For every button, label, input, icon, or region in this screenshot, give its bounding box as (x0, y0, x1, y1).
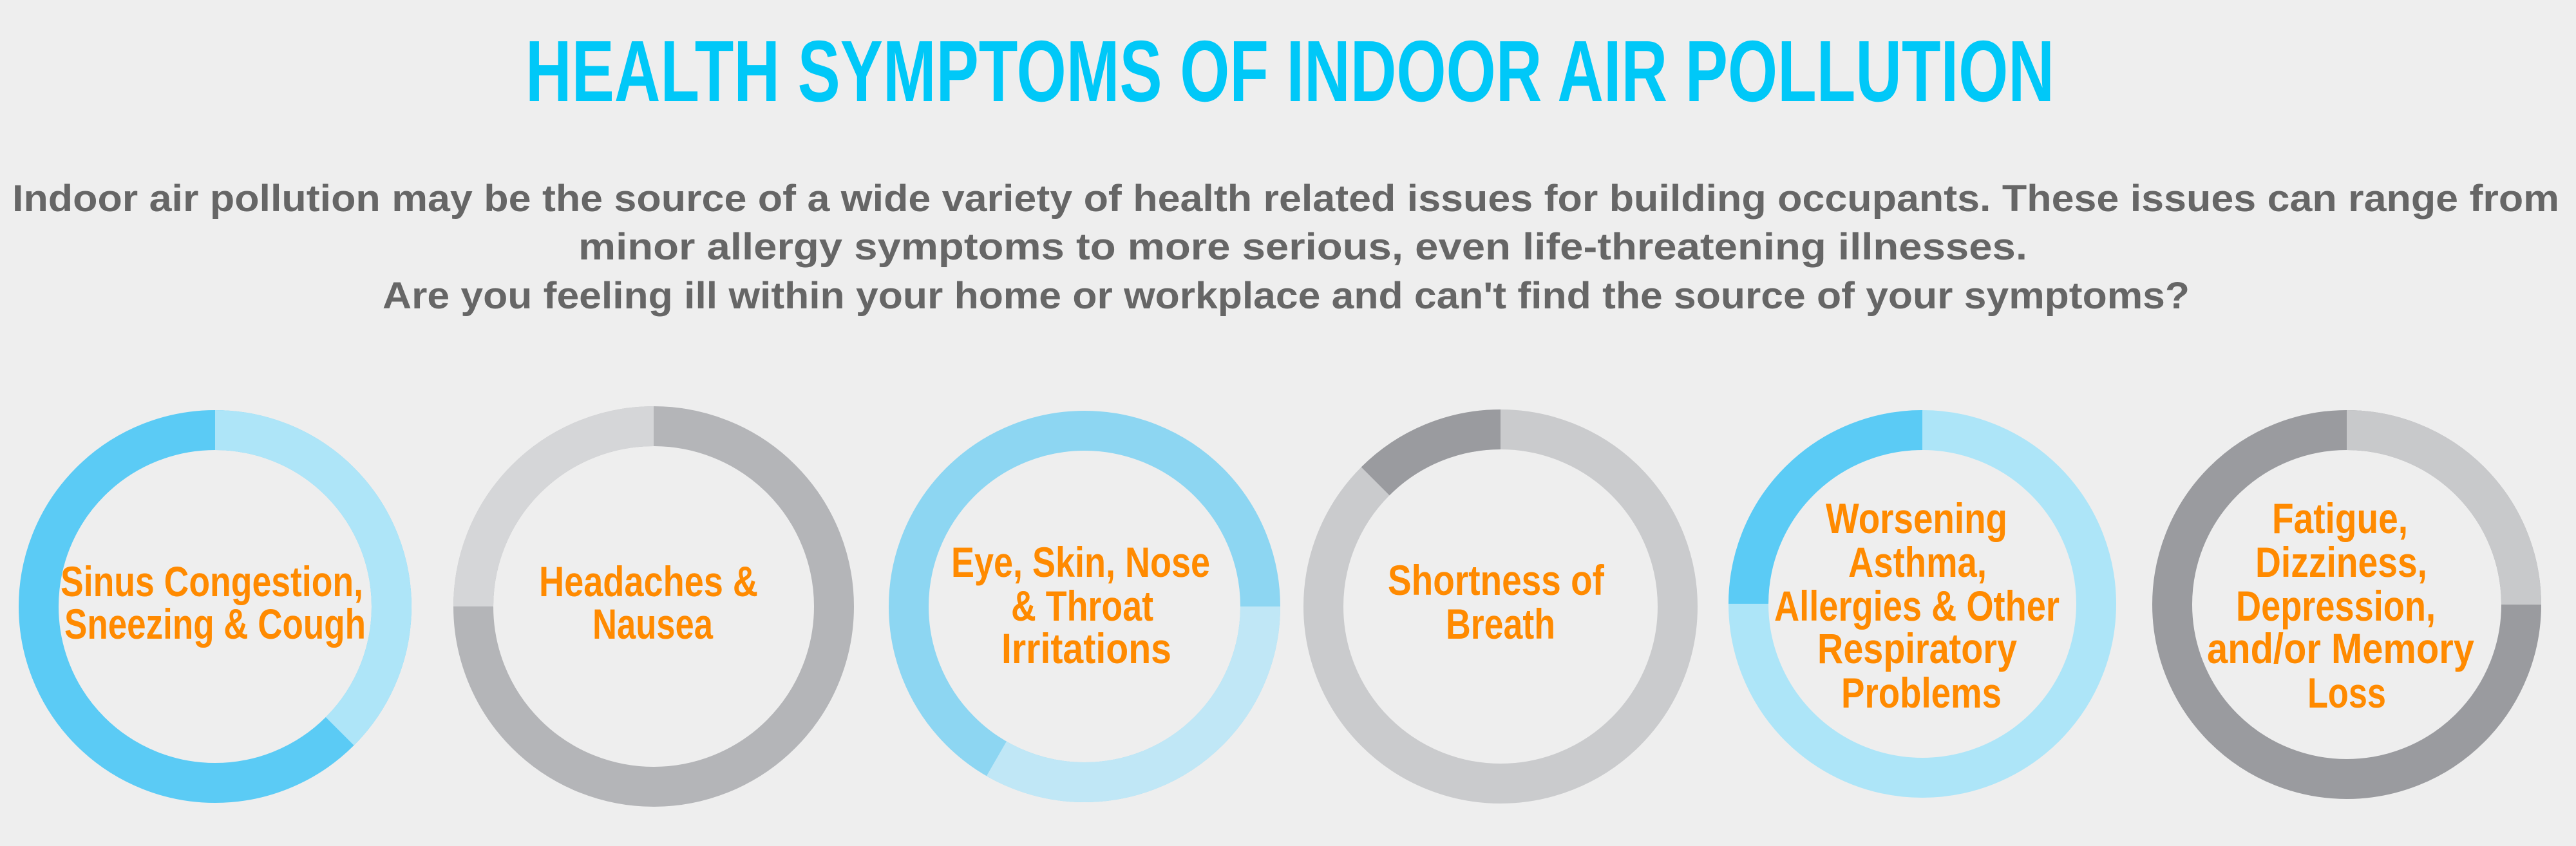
circle 6: fatigue: Fatigue, (2272, 494, 2408, 542)
circle 5: asthma: Respiratory (1817, 625, 2017, 672)
circle 4: shortness of breath: Shortness of (1388, 556, 1605, 604)
circle 3: eye skin nose (909, 431, 1260, 782)
circle 3: eye skin nose: Irritations (1001, 625, 1171, 672)
circle 5: asthma: Worsening (1826, 494, 2007, 542)
intro text: minor allergy symptoms to more serious, even life-threatening illnesses. (578, 226, 2027, 268)
circle 5: asthma (1748, 430, 2096, 778)
intro text (12, 178, 2559, 317)
circle 2: headaches (473, 426, 834, 787)
circle 3: eye skin nose: & Throat (1011, 582, 1153, 630)
circle 6: fatigue: Dizziness, (2255, 538, 2427, 586)
circle 5: asthma: Asthma, (1848, 538, 1987, 586)
circle 2: headaches: Headaches & (539, 558, 758, 605)
circle 1: sinus: Sinus Congestion, (61, 558, 363, 605)
circle 6: fatigue: Loss (2307, 669, 2386, 717)
circle 1: sinus: Sneezing & Cough (64, 600, 366, 648)
circle 6: fatigue (2172, 430, 2521, 779)
intro text: Are you feeling ill within your home or workplace and can't find the source of your symptoms? (383, 275, 2190, 317)
circle 4: shortness of breath (1323, 429, 1678, 784)
circle 6: fatigue: and/or Memory (2207, 625, 2474, 672)
title: HEALTH SYMPTOMS OF INDOOR AIR POLLUTION (526, 23, 2054, 120)
circle 4: shortness of breath: Breath (1446, 600, 1555, 648)
circle 6: fatigue: Depression, (2236, 582, 2436, 630)
circle 5: asthma: Allergies & Other (1774, 582, 2060, 630)
circle 5: asthma: Problems (1841, 669, 2002, 717)
circle 3: eye skin nose: Eye, Skin, Nose (951, 538, 1210, 586)
circle 2: headaches: Nausea (592, 600, 714, 648)
intro text: Indoor air pollution may be the source of a wide variety of health related issues for building occupants. These issues can range from (12, 178, 2559, 220)
circle 1: sinus (39, 430, 392, 783)
